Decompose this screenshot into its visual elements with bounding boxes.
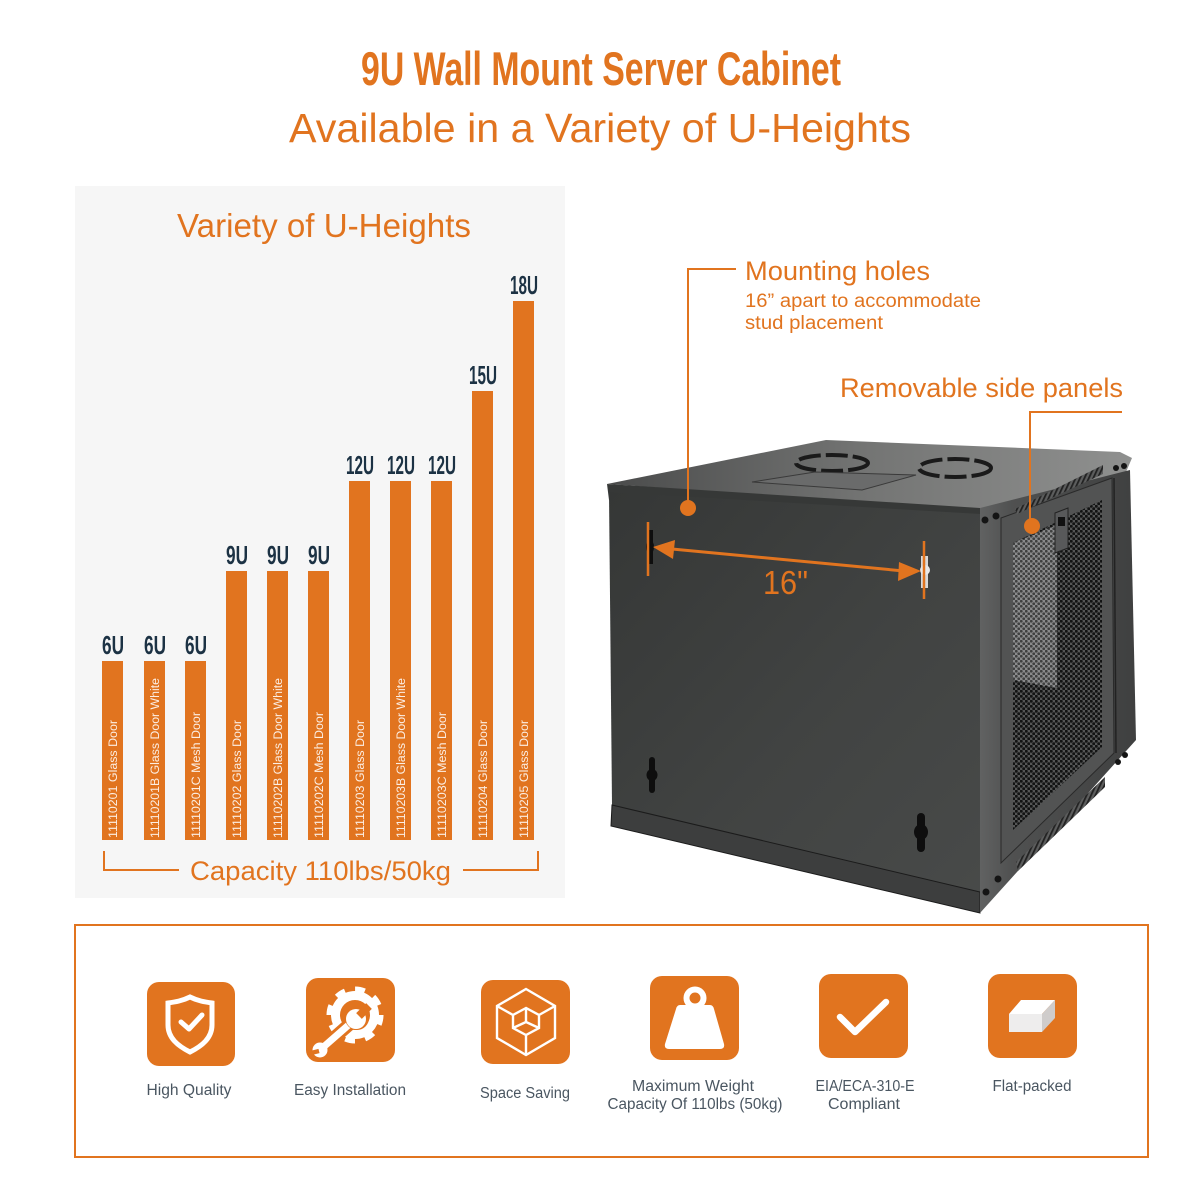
icon: flat-packed box (988, 974, 1077, 1095)
panel: variety of U-heights chart (75, 186, 565, 898)
cabinet photo illustration (607, 440, 1136, 913)
keyholes (646, 530, 928, 848)
bar chart (102, 270, 538, 840)
bar chart: 9U (226, 540, 248, 570)
callout: mounting holes: stud placement (745, 313, 884, 334)
bar chart: 11110203 Glass Door (355, 720, 367, 838)
icon: easy installation gear and wrench (294, 978, 406, 1099)
bar chart: 11110201C Mesh Door (191, 712, 203, 838)
16 inch dimension: 16" (763, 564, 808, 601)
bar chart: 12U (387, 450, 415, 480)
icon: maximum weight: Capacity Of 110lbs (50kg) (608, 1096, 782, 1113)
panel: features (75, 925, 1148, 1157)
callout: mounting holes: Mounting holes (745, 256, 930, 286)
bar chart: 15U (469, 360, 497, 390)
bar chart: 9U (267, 540, 289, 570)
title: 9U Wall Mount Server Cabinet (361, 42, 841, 95)
icon: flat-packed box: Flat-packed (992, 1078, 1072, 1095)
icon: EIA/ECA-310-E check mark: Compliant (828, 1096, 901, 1113)
title (289, 42, 911, 151)
bar chart: 11110204 Glass Door (478, 720, 490, 838)
bar chart: 11110201 Glass Door (108, 720, 120, 838)
bar chart: 11110201B Glass Door White (150, 678, 162, 838)
bar chart: 9U (308, 540, 330, 570)
callout: mounting holes (680, 256, 981, 516)
icon: maximum weight (608, 976, 782, 1113)
icon: easy installation gear and wrench: Easy Installation (294, 1082, 406, 1099)
capacity bracket (104, 851, 538, 886)
bar chart: 11110205 Glass Door (519, 720, 531, 838)
title: Available in a Variety of U-Heights (289, 105, 911, 151)
icon: space saving cube (480, 980, 570, 1102)
callout: removable side panels (840, 373, 1123, 534)
bar chart: 11110202 Glass Door (232, 720, 244, 838)
icon: maximum weight: Maximum Weight (632, 1078, 755, 1095)
bar chart: 6U (185, 630, 207, 660)
bar chart: 6U (102, 630, 124, 660)
bar chart: 11110202B Glass Door White (273, 678, 285, 838)
icon: high quality shield (146, 982, 235, 1099)
icon: EIA/ECA-310-E check mark: EIA/ECA-310-E (816, 1078, 914, 1095)
bar chart: 18U (510, 270, 538, 300)
bar chart: 6U (144, 630, 166, 660)
callout: removable side panels: Removable side panels (840, 373, 1123, 403)
icon: space saving cube: Space Saving (480, 1085, 570, 1102)
16 inch dimension (648, 522, 930, 601)
bar chart: 11110202C Mesh Door (314, 712, 326, 838)
icon: high quality shield: High Quality (146, 1082, 232, 1099)
bar chart: 11110203C Mesh Door (437, 712, 449, 838)
bar chart: 12U (428, 450, 456, 480)
icon: EIA/ECA-310-E check mark (816, 974, 914, 1113)
bar chart: 12U (346, 450, 374, 480)
panel heading: Variety of U-Heights (177, 207, 471, 244)
bar chart: 11110203B Glass Door White (396, 678, 408, 838)
callout: mounting holes: 16” apart to accommodate (745, 291, 981, 312)
capacity bracket: Capacity 110lbs/50kg (190, 856, 451, 886)
